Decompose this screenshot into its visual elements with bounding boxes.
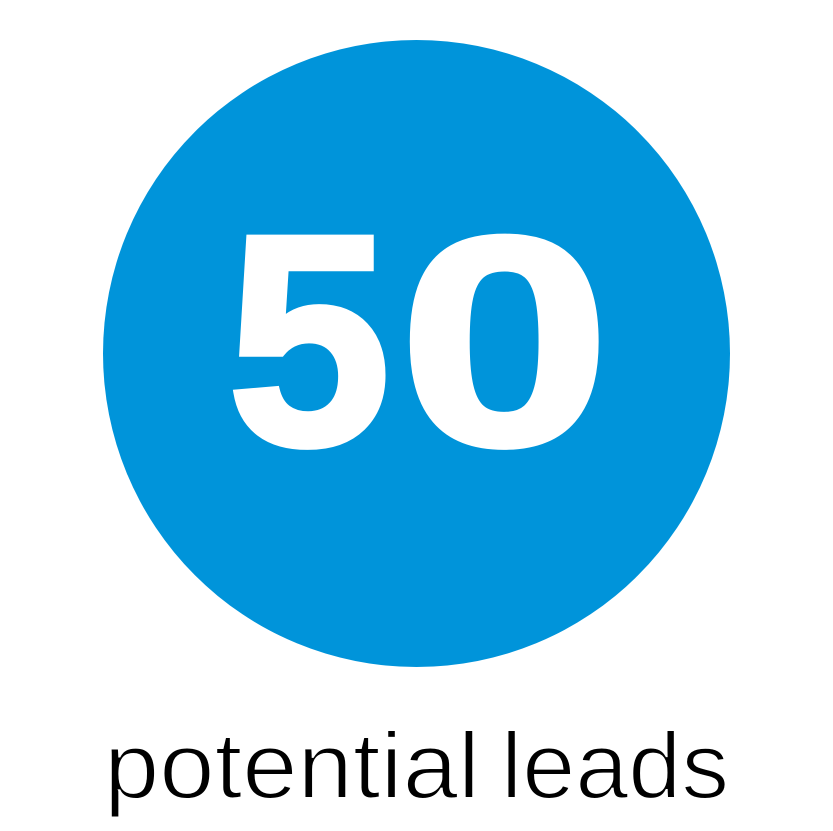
number 50: 0 — [399, 176, 610, 507]
number 50 — [227, 172, 610, 508]
label: potential leads: leads — [501, 713, 729, 818]
label: potential leads — [104, 713, 729, 818]
number 50: 5 — [227, 172, 391, 508]
blue circle — [103, 40, 730, 667]
label: potential leads: potential — [104, 713, 480, 818]
